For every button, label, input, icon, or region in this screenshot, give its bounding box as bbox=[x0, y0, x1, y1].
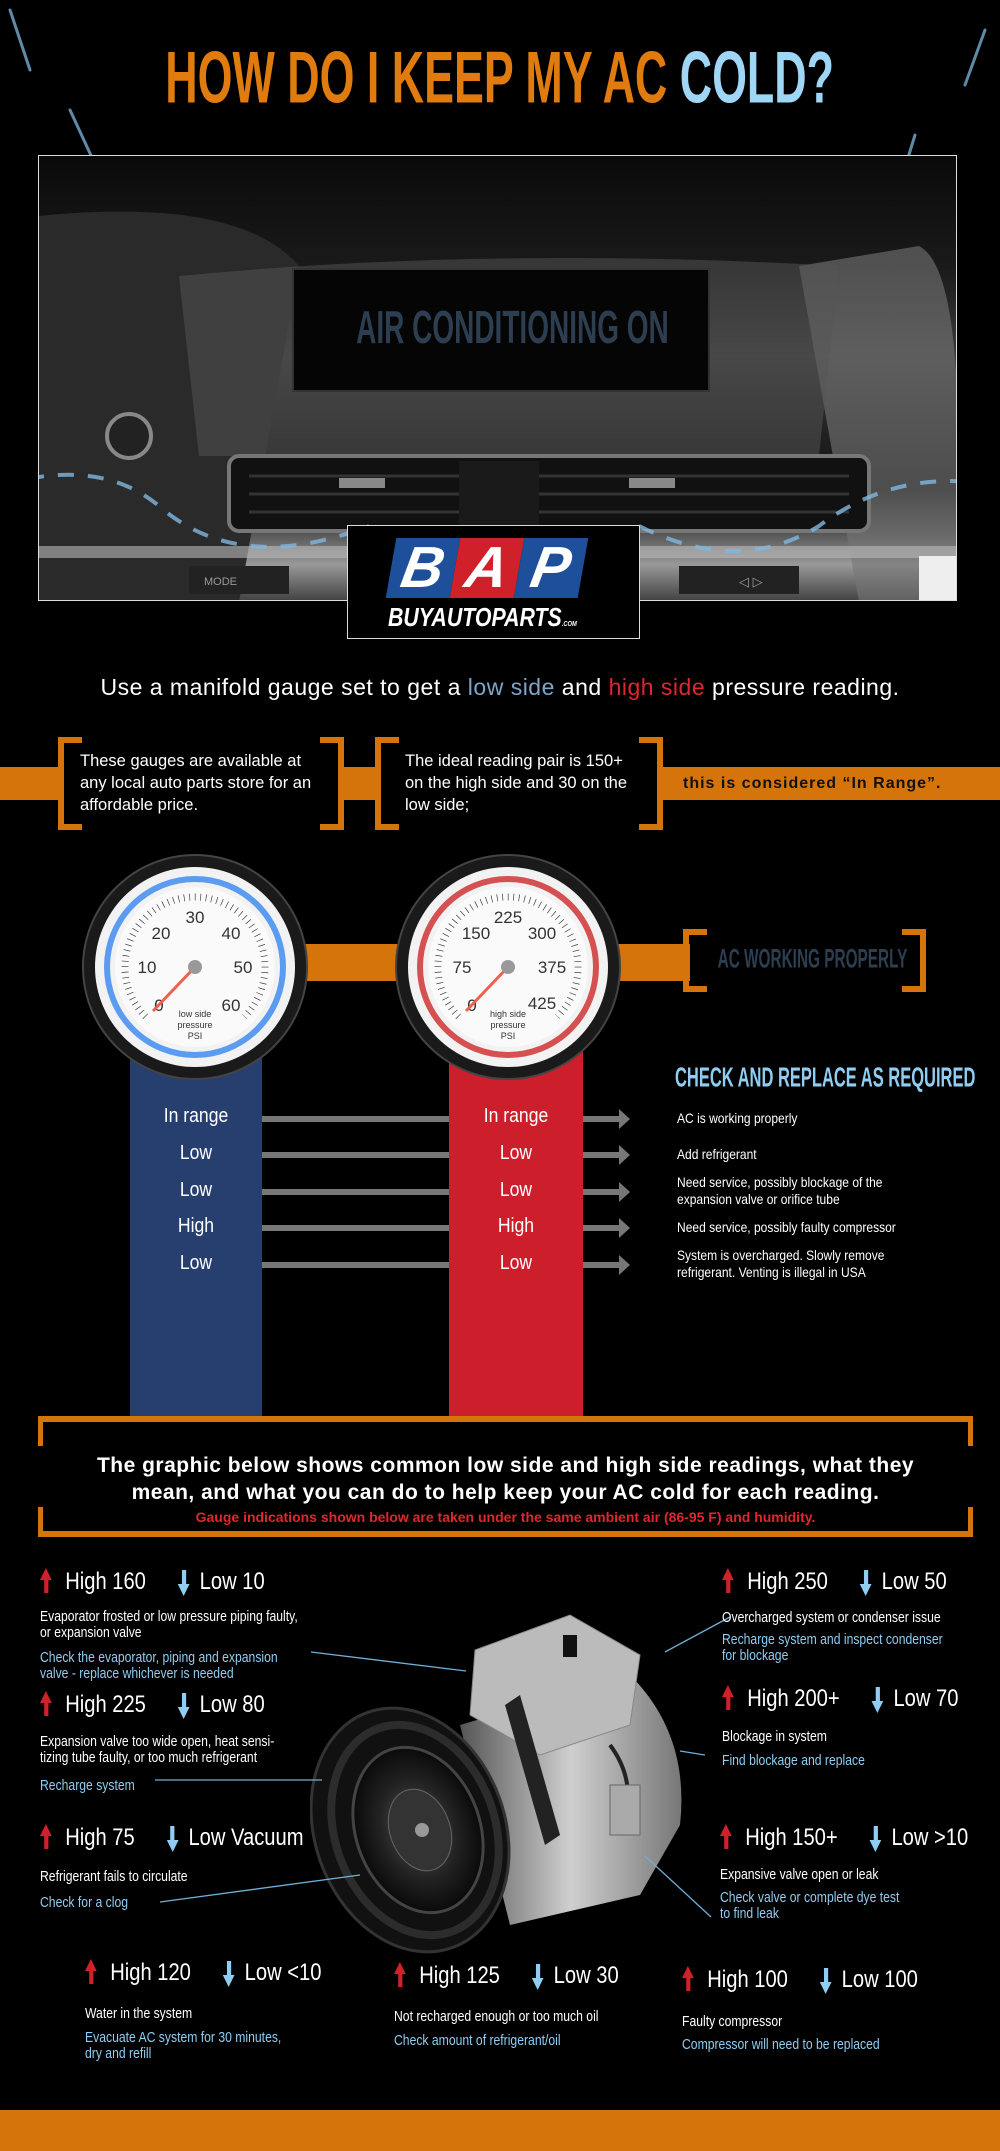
row arrows bbox=[262, 1109, 630, 1275]
bracket box: graphic below: The graphic below shows common low side and high side readings, what they bbox=[97, 1454, 914, 1477]
gauge: low side: PSI bbox=[188, 1031, 202, 1041]
reading: high 150+ low >10: to find leak bbox=[720, 1906, 779, 1922]
outcome descriptions: AC is working properly bbox=[677, 1110, 797, 1126]
text: Low bbox=[500, 1179, 532, 1201]
outcome descriptions: Need service, possibly blockage of the bbox=[677, 1174, 882, 1190]
reading: high 250 low 50: Recharge system and inspect condenser bbox=[722, 1632, 943, 1648]
footer band bbox=[0, 2110, 1000, 2151]
reading: high 225 low 80: Recharge system bbox=[40, 1778, 135, 1794]
heading: check and replace: CHECK AND REPLACE AS REQUIRED bbox=[675, 1062, 975, 1093]
reading: high 160 low 10: Check the evaporator, piping and expansion bbox=[40, 1650, 278, 1666]
reading: high 225 low 80: tizing tube faulty, or too much refrigerant bbox=[40, 1750, 257, 1766]
reading: high 100 low 100: High 100 Low 100 bbox=[707, 1966, 918, 1993]
gauge: high side: 425 bbox=[528, 994, 556, 1013]
bracket box: ideal reading: The ideal reading pair is 150+ on the high side and 30 on the low side; bbox=[405, 752, 627, 814]
reading: high 100 low 100 bbox=[682, 1966, 918, 2053]
reading: high 100 low 100: Compressor will need to be replaced bbox=[682, 2037, 880, 2053]
reading: high 160 low 10 bbox=[40, 1568, 298, 1682]
gauge: high side: 300 bbox=[528, 924, 556, 943]
reading: high 225 low 80 bbox=[40, 1691, 274, 1794]
gauge: low side: 40 bbox=[222, 924, 240, 943]
gauge: high side: PSI bbox=[501, 1031, 515, 1041]
in range text: this is considered “In Range”. bbox=[683, 775, 942, 792]
gauge: low side: 50 bbox=[234, 958, 252, 977]
orange band bbox=[0, 767, 1000, 800]
gauge: low side: low side bbox=[179, 1009, 211, 1019]
gauge: high side: 150 bbox=[462, 924, 490, 943]
column labels high side bbox=[484, 1105, 548, 1274]
outcome descriptions: refrigerant. Venting is illegal in USA bbox=[677, 1264, 866, 1280]
logo: BAP: A bbox=[460, 535, 514, 600]
bracket box: gauges available: These gauges are available at any local auto parts store for an affordable price. bbox=[80, 752, 311, 814]
reading: high 250 low 50: for blockage bbox=[722, 1648, 788, 1664]
photo: dashboard bbox=[38, 155, 957, 601]
text: Low bbox=[180, 1252, 212, 1274]
reading: high 200+ low 70: Find blockage and replace bbox=[722, 1753, 865, 1769]
outcome descriptions bbox=[677, 1110, 896, 1280]
reading: high 160 low 10: High 160 Low 10 bbox=[65, 1568, 265, 1595]
text: Low bbox=[500, 1142, 532, 1164]
gauge: low side: 10 bbox=[138, 958, 156, 977]
bracket box: graphic below: mean, and what you can do to help keep your AC cold for each reading. bbox=[132, 1481, 879, 1504]
red column bbox=[449, 1050, 583, 1416]
gauge: high side: 375 bbox=[538, 958, 566, 977]
orange connector bbox=[280, 944, 690, 981]
gauge: high side: high side bbox=[490, 1009, 526, 1019]
gauge: low side: 0 bbox=[154, 996, 164, 1015]
logo: BAP: B bbox=[396, 535, 450, 600]
reading: high 200+ low 70 bbox=[722, 1685, 958, 1769]
reading: high 100 low 100: Faulty compressor bbox=[682, 2014, 782, 2030]
reading: high 250 low 50: Overcharged system or condenser issue bbox=[722, 1610, 941, 1626]
reading: high 75 low vacuum bbox=[40, 1824, 304, 1911]
reading: high 75 low vacuum: High 75 Low Vacuum bbox=[65, 1824, 304, 1851]
reading: high 160 low 10: valve - replace whichever is needed bbox=[40, 1666, 234, 1682]
text: Low bbox=[180, 1142, 212, 1164]
text: In range bbox=[164, 1105, 228, 1127]
reading: high 120 low <10: High 120 Low <10 bbox=[110, 1959, 321, 1986]
photo: dashboard: MODE bbox=[204, 576, 237, 588]
reading: high 200+ low 70: High 200+ Low 70 bbox=[747, 1685, 958, 1712]
reading: high 75 low vacuum: Refrigerant fails to circulate bbox=[40, 1869, 188, 1885]
text: Low bbox=[500, 1252, 532, 1274]
reading: high 225 low 80: High 225 Low 80 bbox=[65, 1691, 265, 1718]
reading: high 160 low 10: Evaporator frosted or low pressure piping faulty, bbox=[40, 1609, 298, 1625]
reading: high 120 low <10: dry and refill bbox=[85, 2046, 151, 2062]
reading: high 200+ low 70: Blockage in system bbox=[722, 1729, 827, 1745]
gauge: low side: pressure bbox=[177, 1020, 213, 1030]
bracket: ac working properly: AC WORKING PROPERLY bbox=[718, 945, 907, 974]
background streaks bbox=[8, 8, 986, 155]
reading: high 75 low vacuum: Check for a clog bbox=[40, 1895, 128, 1911]
gauge: low side: 30 bbox=[186, 908, 204, 927]
reading: high 225 low 80: Expansion valve too wide open, heat sensi- bbox=[40, 1734, 274, 1750]
screen: air conditioning on: AIR CONDITIONING ON bbox=[356, 303, 669, 353]
photo: dashboard: ◁ ▷ bbox=[739, 574, 763, 589]
reading: high 125 low 30 bbox=[394, 1962, 619, 2049]
callout lines bbox=[155, 1616, 730, 1918]
intro text: Use a manifold gauge set to get a low side and high side pressure reading. bbox=[100, 674, 900, 700]
title: HOW DO I KEEP MY AC COLD? bbox=[166, 36, 834, 118]
gauge: high side: pressure bbox=[490, 1020, 526, 1030]
bracket: ac working properly bbox=[683, 929, 926, 992]
column labels low side bbox=[164, 1105, 228, 1274]
outcome descriptions: Add refrigerant bbox=[677, 1146, 757, 1162]
gauge: high side bbox=[395, 854, 621, 1080]
screen: air conditioning on bbox=[292, 268, 710, 392]
compressor illustration bbox=[310, 1614, 682, 1954]
gauge: low side: 60 bbox=[222, 996, 240, 1015]
reading: high 125 low 30: Not recharged enough or too much oil bbox=[394, 2009, 598, 2025]
reading: high 125 low 30: Check amount of refrigerant/oil bbox=[394, 2033, 561, 2049]
logo: BAP: BUYAUTOPARTS.COM bbox=[388, 602, 577, 632]
reading: high 250 low 50 bbox=[722, 1568, 947, 1664]
blue column bbox=[130, 1050, 262, 1416]
gauge: high side: 0 bbox=[467, 996, 477, 1015]
text: High bbox=[178, 1215, 214, 1237]
logo: BAP bbox=[347, 525, 640, 639]
reading: high 150+ low >10: Expansive valve open or leak bbox=[720, 1867, 878, 1883]
text: High bbox=[498, 1215, 534, 1237]
reading: high 120 low <10: Water in the system bbox=[85, 2006, 192, 2022]
reading: high 125 low 30: High 125 Low 30 bbox=[419, 1962, 619, 1989]
outcome descriptions: Need service, possibly faulty compressor bbox=[677, 1219, 896, 1235]
bracket box: ideal reading bbox=[375, 737, 663, 830]
bracket box: gauges available bbox=[58, 737, 344, 830]
text: In range bbox=[484, 1105, 548, 1127]
gauge: low side: 20 bbox=[152, 924, 170, 943]
reading: high 120 low <10 bbox=[85, 1959, 321, 2062]
reading: high 150+ low >10: Check valve or complete dye test bbox=[720, 1890, 899, 1906]
reading: high 120 low <10: Evacuate AC system for 30 minutes, bbox=[85, 2030, 281, 2046]
gauge: high side: 225 bbox=[494, 908, 522, 927]
reading: high 150+ low >10: High 150+ Low >10 bbox=[745, 1824, 968, 1851]
logo: BAP: P bbox=[526, 535, 576, 600]
reading: high 150+ low >10 bbox=[720, 1824, 968, 1922]
bracket box: graphic below: Gauge indications shown below are taken under the same ambient air (86-95 F) and humidity. bbox=[196, 1509, 815, 1525]
gauge: low side bbox=[82, 854, 308, 1080]
outcome descriptions: expansion valve or orifice tube bbox=[677, 1191, 840, 1207]
reading: high 250 low 50: High 250 Low 50 bbox=[747, 1568, 947, 1595]
outcome descriptions: System is overcharged. Slowly remove bbox=[677, 1247, 884, 1263]
bracket box: graphic below bbox=[38, 1416, 973, 1537]
reading: high 160 low 10: or expansion valve bbox=[40, 1625, 142, 1641]
text: Low bbox=[180, 1179, 212, 1201]
gauge: high side: 75 bbox=[453, 958, 471, 977]
